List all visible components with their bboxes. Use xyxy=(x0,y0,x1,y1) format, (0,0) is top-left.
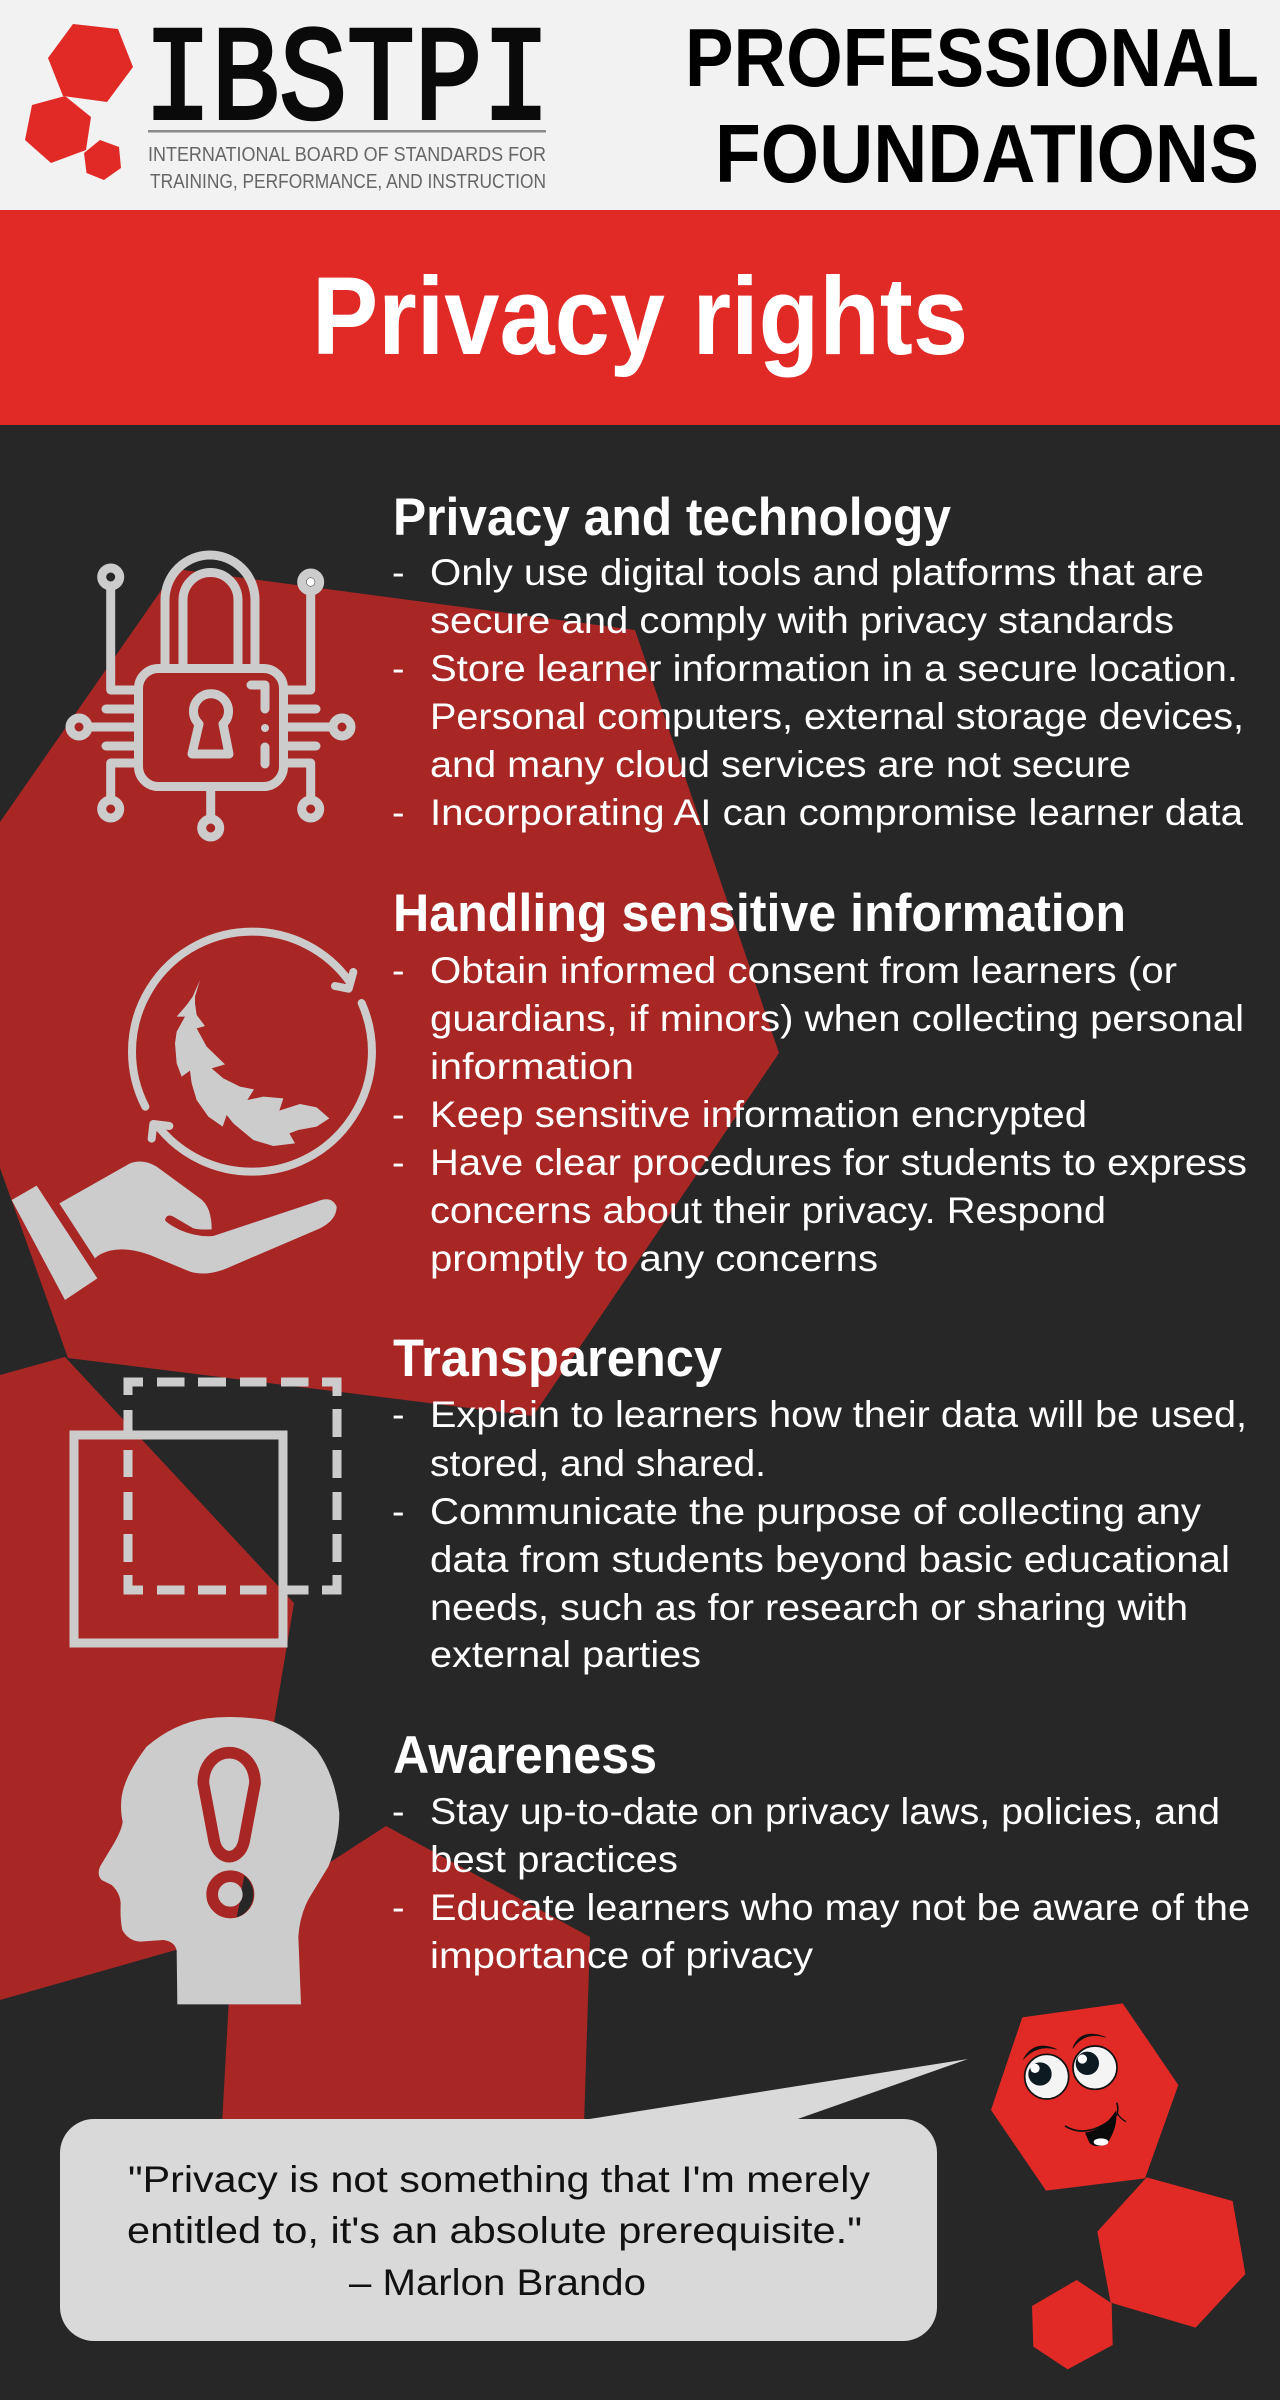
heading: Privacy and technology xyxy=(393,488,951,547)
bullet list: needs, such as for research or sharing with xyxy=(430,1586,1188,1628)
bullet list: Educate learners who may not be aware of the xyxy=(430,1886,1250,1928)
bullet list: - xyxy=(392,1141,404,1183)
logo xyxy=(25,7,550,193)
bullet list: - xyxy=(392,1093,404,1135)
title: Privacy rights xyxy=(312,255,968,378)
bullet list: - xyxy=(392,949,404,991)
bullet list: - xyxy=(392,1490,404,1532)
quote text xyxy=(127,2158,870,2303)
bullet list: Personal computers, external storage devices, xyxy=(430,695,1244,737)
bullet list: - xyxy=(392,1790,404,1832)
bullet list: Communicate the purpose of collecting any xyxy=(430,1490,1201,1532)
quote text: entitled to, it's an absolute prerequisite." xyxy=(127,2209,862,2251)
bullet list: promptly to any concerns xyxy=(430,1237,878,1279)
bullet list: stored, and shared. xyxy=(430,1442,766,1484)
section: privacy and technology xyxy=(392,488,1244,833)
cycle arrows xyxy=(132,932,372,1172)
icon: overlapping squares xyxy=(74,1382,337,1643)
bullet list xyxy=(392,1790,1250,1976)
icon: head with exclamation mark xyxy=(99,1717,339,2004)
bullet list: Only use digital tools and platforms that are xyxy=(430,551,1204,593)
bullet list: Keep sensitive information encrypted xyxy=(430,1093,1087,1135)
bullet list xyxy=(392,551,1244,833)
bullet list: - xyxy=(392,1886,404,1928)
feather xyxy=(175,972,329,1146)
bullet list xyxy=(392,949,1247,1279)
bullet list: information xyxy=(430,1045,634,1087)
dashed square xyxy=(128,1382,337,1590)
mascot hexagons xyxy=(991,2003,1245,2369)
bullet list: Explain to learners how their data will be used, xyxy=(430,1393,1247,1435)
bullet list xyxy=(392,1393,1247,1675)
series title xyxy=(685,11,1259,200)
bullet list: data from students beyond basic educational xyxy=(430,1538,1230,1580)
callout: quote speech bubble xyxy=(60,2059,968,2341)
bullet list: - xyxy=(392,551,404,593)
bullet list: best practices xyxy=(430,1838,678,1880)
quote text: "Privacy is not something that I'm merely xyxy=(128,2158,870,2200)
mascot face xyxy=(1023,2034,1126,2146)
bullet list: Obtain informed consent from learners (or xyxy=(430,949,1177,991)
logo hexagons xyxy=(25,24,133,180)
decorative background hexagons xyxy=(0,569,779,2125)
bullet list: Incorporating AI can compromise learner data xyxy=(430,791,1243,833)
hand xyxy=(12,1161,337,1300)
solid square xyxy=(74,1435,283,1643)
logo tagline: TRAINING, PERFORMANCE, AND INSTRUCTION xyxy=(150,170,546,193)
bullet list: concerns about their privacy. Respond xyxy=(430,1189,1106,1231)
bullet list: Stay up-to-date on privacy laws, policies, and xyxy=(430,1790,1220,1832)
heading: Awareness xyxy=(393,1726,657,1785)
bullet list: - xyxy=(392,647,404,689)
bullet list: secure and comply with privacy standards xyxy=(430,599,1174,641)
exclamation mark xyxy=(203,1753,255,1917)
header panel xyxy=(0,0,1280,210)
icon: hand holding feather xyxy=(12,932,372,1300)
bullet list: external parties xyxy=(430,1633,701,1675)
mascot: hexagon character xyxy=(991,2003,1245,2369)
section: awareness xyxy=(392,1726,1250,1976)
bullet list: importance of privacy xyxy=(430,1934,813,1976)
bullet list: and many cloud services are not secure xyxy=(430,743,1131,785)
bullet list: Have clear procedures for students to express xyxy=(430,1141,1247,1183)
bullet list: - xyxy=(392,791,404,833)
logo wordmark: IBSTPI xyxy=(144,7,550,159)
title band xyxy=(0,210,1280,425)
heading: Handling sensitive information xyxy=(393,884,1126,943)
bullet list: guardians, if minors) when collecting personal xyxy=(430,997,1244,1039)
head silhouette xyxy=(99,1717,339,2004)
heading: Transparency xyxy=(393,1329,722,1388)
logo tagline: INTERNATIONAL BOARD OF STANDARDS FOR xyxy=(148,143,546,166)
section: handling sensitive information xyxy=(392,884,1247,1279)
logo tagline xyxy=(148,143,546,193)
bullet list: Store learner information in a secure location. xyxy=(430,647,1238,689)
quote text: – Marlon Brando xyxy=(349,2261,646,2303)
icon: digital padlock xyxy=(70,555,351,837)
section: transparency xyxy=(392,1329,1247,1675)
bullet list: - xyxy=(392,1393,404,1435)
